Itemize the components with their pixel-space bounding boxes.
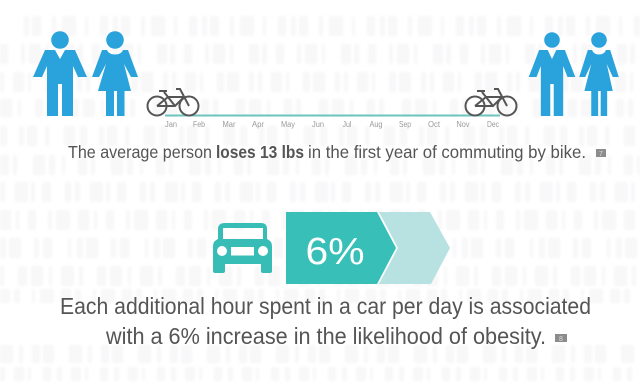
icon: car [213, 223, 272, 273]
icon: bicycle, end [466, 89, 516, 116]
month labels: Jun [312, 120, 324, 129]
footnote marker 8 [555, 334, 567, 343]
caption: weight loss: The average person [68, 142, 212, 162]
footnote marker 7 [596, 149, 606, 158]
footnote marker 8: 8 [559, 336, 563, 343]
month labels: Jul [342, 120, 352, 129]
month labels: Nov [456, 120, 470, 129]
month labels: Apr [252, 120, 264, 129]
caption: weight loss: in the first year of commuting by bike. [308, 142, 586, 162]
month labels: Mar [222, 120, 236, 129]
caption: weight loss [68, 142, 586, 162]
month labels [165, 120, 499, 129]
caption: weight loss: loses 13 lbs [216, 142, 304, 162]
month labels: Feb [193, 120, 205, 129]
icon: bicycle, start [148, 89, 198, 116]
footnote marker 7: 7 [599, 151, 603, 158]
month labels: Sep [399, 120, 411, 129]
month labels: Dec [487, 120, 499, 129]
month labels: Aug [370, 120, 382, 129]
value: 6%: 6% [306, 231, 364, 273]
month labels: Oct [428, 120, 441, 129]
month labels: May [281, 120, 295, 129]
icon: man, right [529, 32, 575, 116]
chevron: light remainder [379, 212, 450, 284]
icon: woman, right [579, 32, 619, 116]
icon: man, left [33, 31, 87, 116]
month labels: Jan [165, 120, 177, 129]
caption: obesity: Each additional hour spent in a car per day is associated [60, 293, 591, 319]
chevron: 6% filled [286, 212, 396, 284]
caption: obesity: with a 6% increase in the likelihood of obesity. [105, 323, 546, 349]
icon: woman, left [92, 31, 138, 116]
timeline line [165, 114, 500, 116]
caption: obesity [60, 293, 591, 349]
